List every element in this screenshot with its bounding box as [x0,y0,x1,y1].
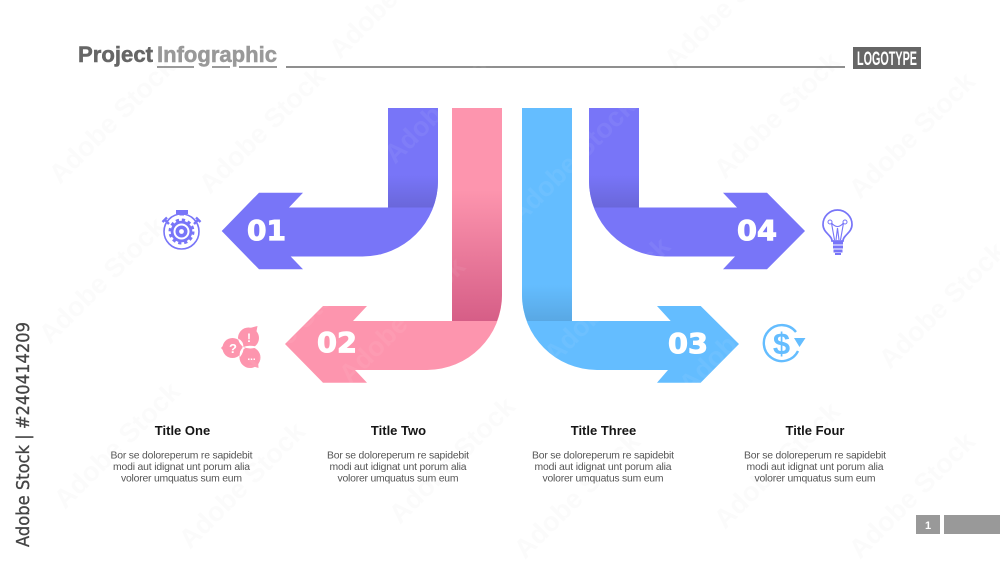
page number: 1 [925,520,931,532]
logotype badge: LOGOTYPE [857,49,917,70]
watermark: Adobe Stock [673,261,812,399]
watermark: Adobe Stock [173,416,312,554]
watermark: Adobe Stock [223,261,362,399]
icon: dollar cycle [764,325,806,361]
watermark: Adobe Stock [48,376,187,514]
arrow 01 [222,108,438,269]
footer bar [944,515,1000,534]
page number [916,515,940,534]
watermark: Adobe Stock [333,251,472,389]
text block: title four [744,423,886,484]
arrow 04 [589,108,805,269]
number 04: 04 [737,215,777,247]
text block: title two: Bor se doloreperum re sapidebit [327,450,469,462]
watermark: Adobe Stock [843,66,982,204]
watermark: Adobe Stock [503,91,642,229]
watermark: Adobe Stock [508,426,647,562]
text block: title four: Bor se doloreperum re sapidebit [744,450,886,462]
text block: title two [327,423,469,484]
text block: title one: volorer umquatus sum eum [121,474,242,484]
text block: title four: modi aut idignat unt porum alia [746,462,884,473]
watermark: Adobe Stock [193,61,332,199]
text block: title one: modi aut idignat unt porum alia [113,462,250,473]
text block: title three: volorer umquatus sum eum [542,474,664,484]
text block: title three [532,423,674,484]
arrow 02 [285,108,502,383]
logotype badge [853,47,921,70]
text block: title two: volorer umquatus sum eum [338,474,458,484]
icon: dollar cycle: $ [773,326,790,361]
title: Project [78,42,154,67]
icon: light bulb [823,210,852,255]
header rule [286,66,845,68]
text block: title four: volorer umquatus sum eum [754,474,876,484]
number 03: 03 [668,328,708,360]
icon: speech bubbles [221,326,260,368]
title: Infographic [157,42,277,67]
watermark: Adobe Stock [708,46,847,184]
stock id vertical text: Adobe Stock | #240414209 [13,322,34,547]
text block: title two: Title Two [371,423,426,438]
watermark: Adobe Stock [843,426,982,562]
number 01: 01 [247,215,286,247]
watermark: Adobe Stock [43,51,182,189]
title [78,42,277,68]
watermark: Adobe Stock [538,231,677,369]
watermark: Adobe Stock [708,396,847,534]
text block: title two: modi aut idignat unt porum alia [330,462,467,473]
text block: title three: Title Three [571,423,636,438]
arrow 03 [522,108,739,383]
watermark: Adobe Stock [378,31,517,169]
text block: title one: Title One [155,423,210,438]
watermark: Adobe Stock [383,391,522,529]
text block: title three: modi aut idignat unt porum alia [534,462,672,473]
watermark: Adobe Stock [33,211,172,349]
icon: speech bubbles: ... [247,352,256,363]
text block: title one [110,423,253,484]
text block: title three: Bor se doloreperum re sapidebit [532,450,674,462]
icon: stopwatch [162,210,200,249]
number 02: 02 [317,327,357,359]
icon: speech bubbles: ! [247,331,251,345]
icon: speech bubbles: ? [229,341,237,356]
text block: title one: Bor se doloreperum re sapidebit [110,450,253,462]
text block: title four: Title Four [786,423,844,438]
